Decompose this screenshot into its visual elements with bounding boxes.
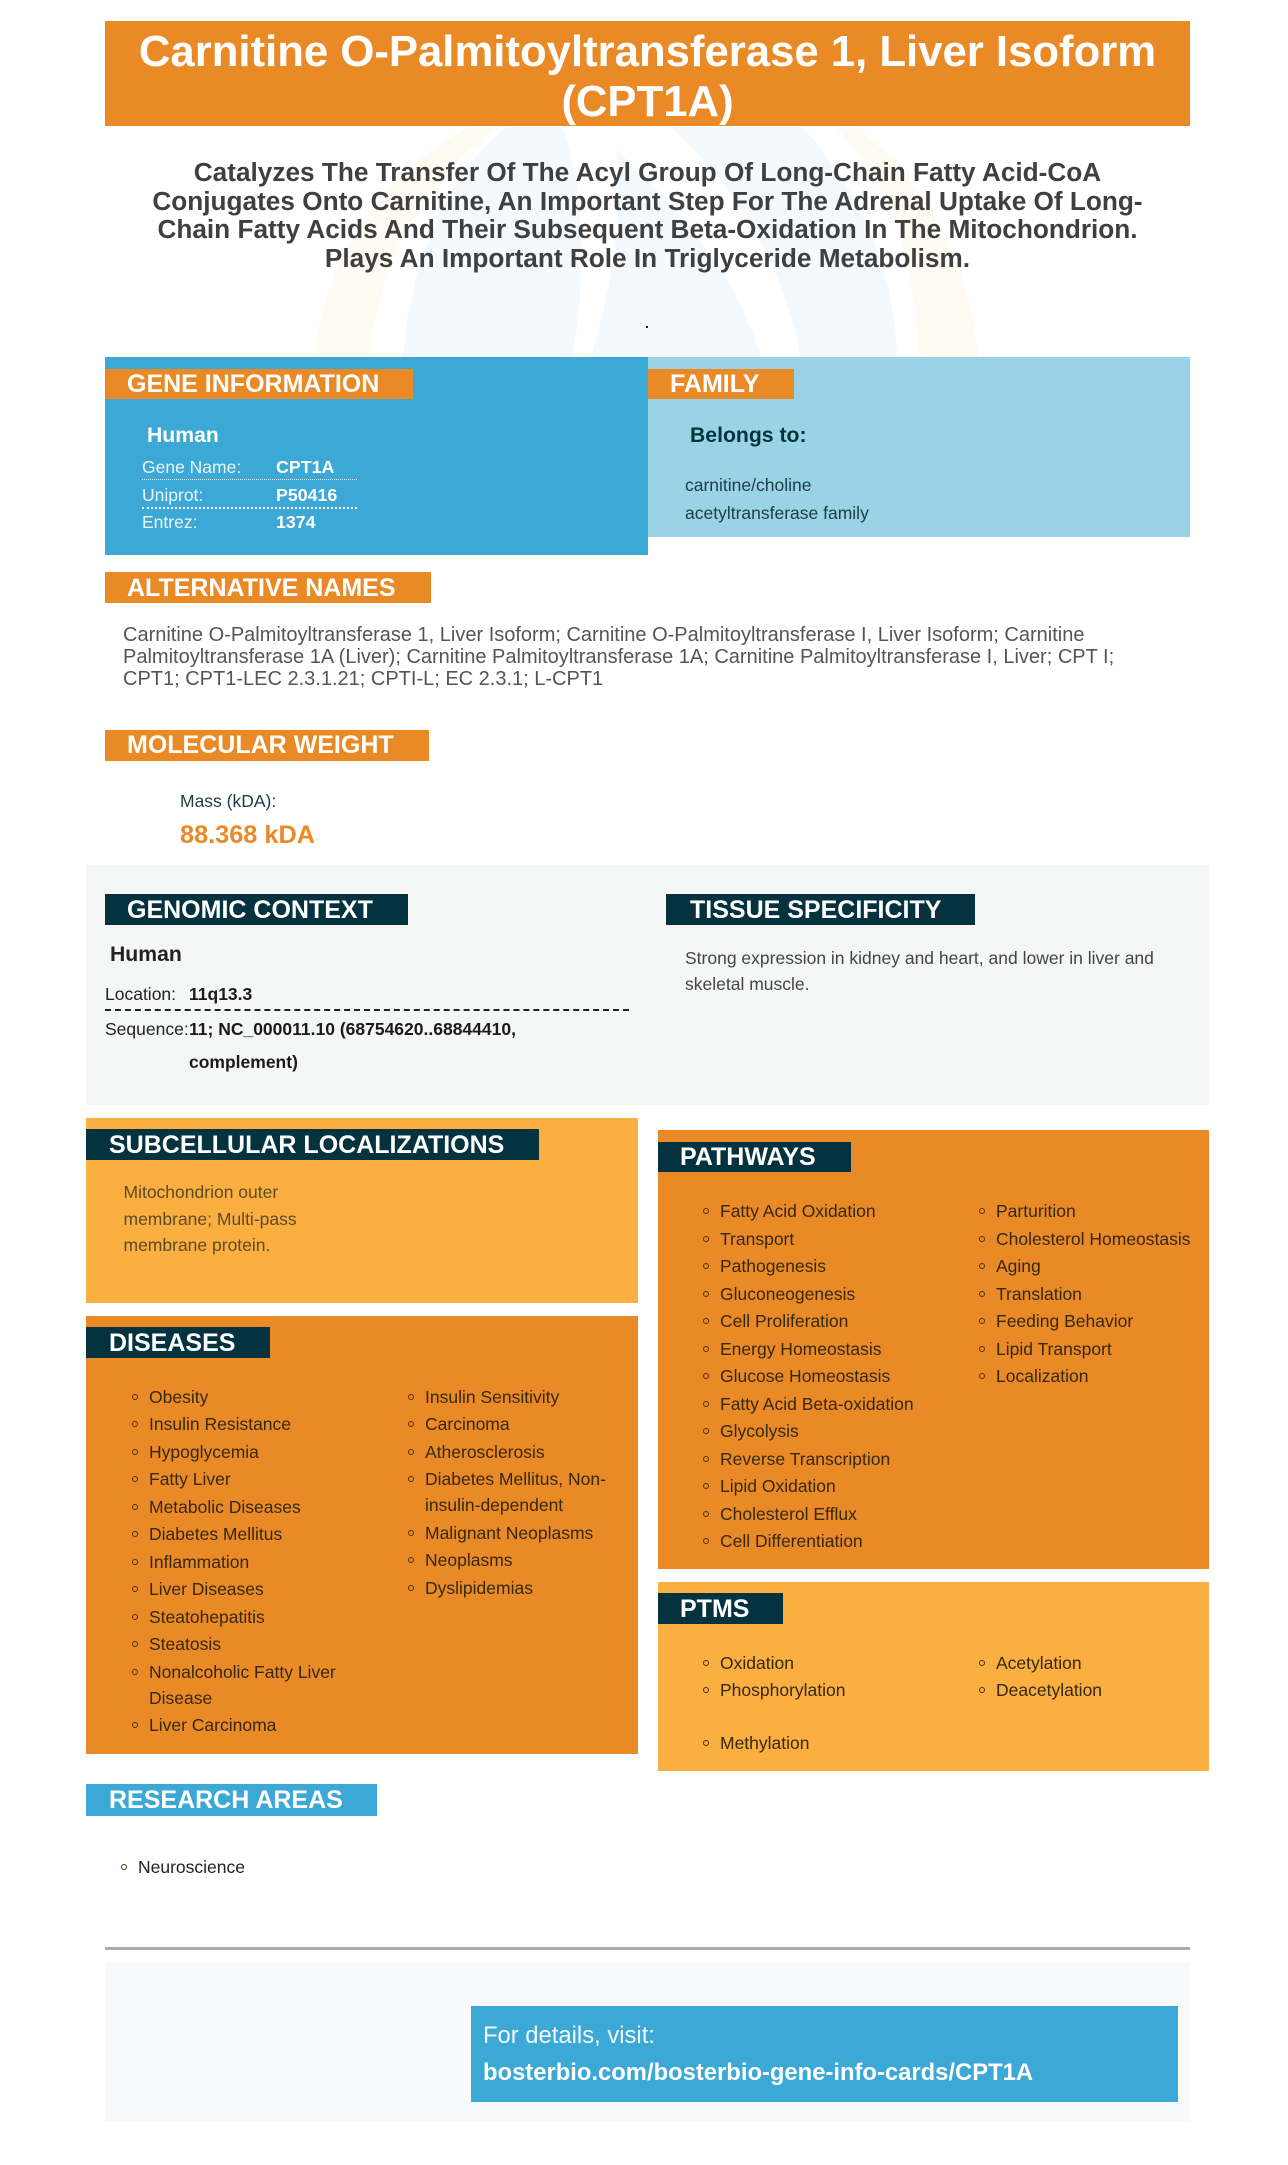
list column 1: Hypoglycemia [149,1442,259,1462]
list column 1: Lipid Oxidation [720,1476,836,1496]
localization text: Mitochondrion outer [124,1182,278,1202]
dot [646,326,648,328]
heading: research areas: RESEARCH AREAS [109,1786,343,1814]
heading: genomic context: GENOMIC CONTEXT [127,896,373,924]
list column 2: Parturition [996,1201,1076,1221]
list column 2 [979,1201,1191,1386]
heading: family [648,369,794,399]
list column 2: Feeding Behavior [996,1311,1133,1331]
list column 1 [703,1653,846,1753]
list column 1: Metabolic Diseases [149,1497,301,1517]
callout label: For details, visit: [483,2022,655,2049]
localization text: membrane; Multi-pass [124,1209,297,1229]
list column 2 [408,1387,606,1598]
list column 1: Liver Diseases [149,1579,264,1599]
uniprot row: Uniprot: [142,485,203,505]
family text [685,475,869,523]
entrez row: Entrez: [142,512,197,532]
list column 2: Dyslipidemias [425,1578,533,1598]
description: Catalyzes The Transfer Of The Acyl Group Of Long-Chain Fatty Acid-CoA [194,157,1101,187]
list column 1: Cell Proliferation [720,1311,848,1331]
alternative names text: CPT1; CPT1-LEC 2.3.1.21; CPTI-L; EC 2.3.1; L-CPT1 [123,668,603,690]
list column 1: Reverse Transcription [720,1448,890,1468]
list column 1: Obesity [149,1387,208,1407]
list column 1: Disease [149,1688,212,1708]
panel: family [648,357,1190,537]
list column 2: Carcinoma [425,1414,510,1434]
heading: gene information: GENE INFORMATION [127,370,379,398]
list column 1 [703,1201,914,1551]
list column 2: Acetylation [996,1653,1082,1673]
list column 2: insulin-dependent [425,1495,563,1515]
list column 1: Inflammation [149,1552,249,1572]
list column 1: Oxidation [720,1653,794,1673]
heading [658,1593,783,1624]
alternative names text: Carnitine O-Palmitoyltransferase 1, Liver Isoform; Carnitine O-Palmitoyltransferase I, Liver Isoform; Carnitine [123,624,1084,646]
list column 2: Translation [996,1284,1082,1304]
mass label: Mass (kDA): [180,791,276,811]
title: Carnitine O-Palmitoyltransferase 1, Liver Isoform [139,27,1156,76]
list column 1: Insulin Resistance [149,1414,291,1434]
family text: acetyltransferase family [685,503,869,523]
list column 1: Steatohepatitis [149,1607,265,1627]
localization text: membrane protein. [124,1235,270,1255]
title: (CPT1A) [561,77,734,126]
localization text [124,1182,297,1255]
list column 1: Transport [720,1228,794,1248]
organism: Human [110,943,182,966]
list column 2: Neoplasms [425,1550,513,1570]
panel: genomic context and tissue specificity: 11; NC_000011.10 (68754620..68844410, [189,1019,516,1039]
tissue text: Strong expression in kidney and heart, and lower in liver and [685,948,1154,968]
heading [86,1327,270,1358]
list column 1: Liver Carcinoma [149,1715,276,1735]
list column 2: Localization [996,1366,1088,1386]
list column 1: Glycolysis [720,1421,799,1441]
list column 2: Aging [996,1256,1041,1276]
heading [658,1142,851,1172]
tissue text [685,948,1154,994]
heading: PTMS [680,1595,749,1623]
description: Conjugates Onto Carnitine, An Important Step For The Adrenal Uptake Of Long- [152,186,1143,216]
belongs to: Belongs to: [690,424,807,447]
list column 2: Atherosclerosis [425,1442,545,1462]
list column 1: Energy Homeostasis [720,1338,881,1358]
panel: footer [105,1962,1190,2121]
list column 2: Diabetes Mellitus, Non- [425,1469,606,1489]
panel: gene information: CPT1A [276,457,334,477]
panel: gene information [105,357,648,555]
list column 1: Fatty Acid Oxidation [720,1201,876,1221]
list column 1: Nonalcoholic Fatty Liver [149,1662,336,1682]
mass value: 88.368 kDA [180,821,315,849]
heading: DISEASES [109,1329,235,1357]
title [105,21,1190,126]
gene name row: Gene Name: [142,457,241,477]
list column 1: Cell Differentiation [720,1531,863,1551]
list column 1: Gluconeogenesis [720,1284,855,1304]
list column 1 [132,1387,336,1735]
heading: PATHWAYS [680,1143,816,1171]
heading: SUBCELLULAR LOCALIZATIONS [109,1131,504,1159]
description [152,157,1143,273]
heading: tissue specificity: TISSUE SPECIFICITY [690,896,941,924]
list column 1: Fatty Acid Beta-oxidation [720,1394,914,1414]
list column 2: Insulin Sensitivity [425,1387,559,1407]
list column 2: Malignant Neoplasms [425,1523,593,1543]
panel: genomic context and tissue specificity: complement) [189,1052,298,1072]
list column 2 [979,1653,1102,1700]
panel: gene information: 1374 [276,512,316,532]
alternative names text: Palmitoyltransferase 1A (Liver); Carnitine Palmitoyltransferase 1A; Carnitine Palmitoyltransferase I, Liver; CPT I; [123,646,1114,668]
callout: details link [471,2006,1178,2102]
heading: alternative names: ALTERNATIVE NAMES [127,574,396,602]
panel: genomic context and tissue specificity [86,865,1209,1105]
panel: pathways [658,1130,1209,1569]
background watermark [315,127,978,357]
location: Location: [105,984,176,1004]
panel: gene information: P50416 [276,485,337,505]
sequence: Sequence: [105,1019,189,1039]
panel: genomic context and tissue specificity: 11q13.3 [189,984,252,1004]
family text: carnitine/choline [685,475,811,495]
panel: subcellular localizations [86,1118,638,1303]
heading: molecular weight: MOLECULAR WEIGHT [127,731,394,759]
list column 2: Deacetylation [996,1680,1102,1700]
research areas list: Neuroscience [138,1857,245,1877]
divider [105,1947,1190,1950]
list column 1: Fatty Liver [149,1469,231,1489]
list column 1: Phosphorylation [720,1680,846,1700]
list column 2: Lipid Transport [996,1338,1112,1358]
list column 1: Glucose Homeostasis [720,1366,890,1386]
list column 1: Cholesterol Efflux [720,1504,857,1524]
organism: Human [147,424,219,447]
callout url: bosterbio.com/bosterbio-gene-info-cards/CPT1A [483,2059,1033,2086]
description: Chain Fatty Acids And Their Subsequent Beta-Oxidation In The Mitochondrion. [157,214,1138,244]
list column 1: Methylation [720,1733,810,1753]
description: Plays An Important Role In Triglyceride Metabolism. [325,243,970,273]
list column 1: Pathogenesis [720,1256,826,1276]
alternative names text [123,624,1114,690]
list column 2: Cholesterol Homeostasis [996,1228,1191,1248]
tissue text: skeletal muscle. [685,974,810,994]
list column 1: Diabetes Mellitus [149,1524,282,1544]
panel: diseases [86,1316,638,1754]
list column 1: Steatosis [149,1634,221,1654]
panel: PTMs [658,1582,1209,1771]
heading: family: FAMILY [670,370,759,398]
